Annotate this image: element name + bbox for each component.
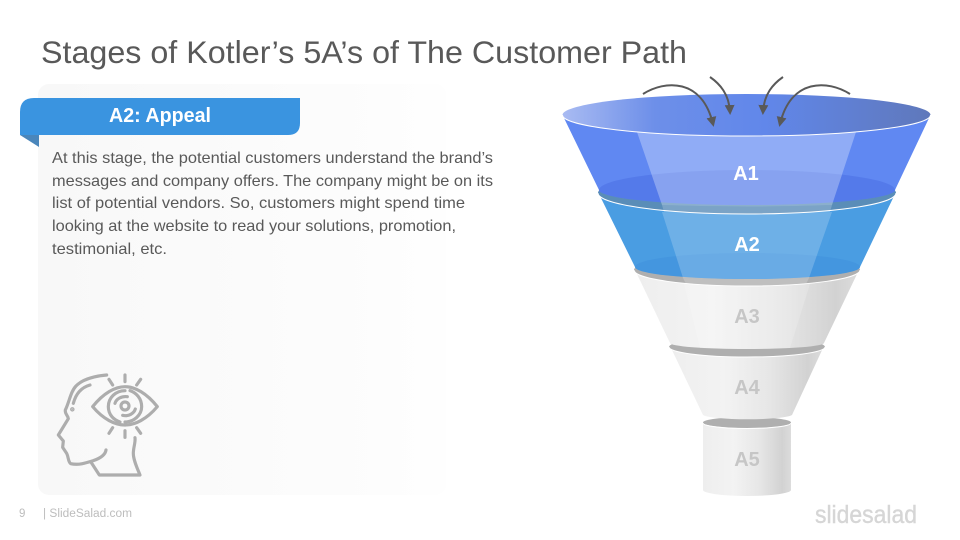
ribbon heading: A2: Appeal [109, 104, 211, 127]
arrows [643, 77, 850, 124]
footer page number: 9 [19, 508, 25, 520]
title: Stages of Kotler’s 5A’s of The Customer Path [41, 34, 687, 70]
stage A5 [703, 417, 791, 496]
body text: testimonial, etc. [52, 241, 167, 258]
stage A3 [634, 254, 860, 349]
stage A1: A1 [733, 163, 759, 185]
body text [52, 150, 493, 258]
stage A3: A3 [734, 306, 760, 328]
stage A4 [669, 337, 825, 419]
funnel [562, 77, 930, 496]
panel: description [20, 84, 493, 495]
icon: head with eye [58, 375, 157, 475]
stage A4: A4 [734, 377, 761, 399]
footer source: | SlideSalad.com [43, 508, 132, 520]
body text: looking at the website to read your solutions, promotion, [52, 218, 456, 235]
ribbon heading [20, 98, 300, 147]
body text: list of potential vendors. So, customers might spend time [52, 195, 465, 212]
stage A1 [562, 94, 930, 214]
body text: At this stage, the potential customers understand the brand’s [52, 150, 493, 167]
body text: messages and company offers. The company might be on its [52, 173, 493, 190]
logo: slidesalad [815, 501, 917, 529]
stage A5: A5 [734, 449, 760, 471]
stage A2 [598, 172, 896, 286]
stage A2: A2 [734, 234, 760, 256]
